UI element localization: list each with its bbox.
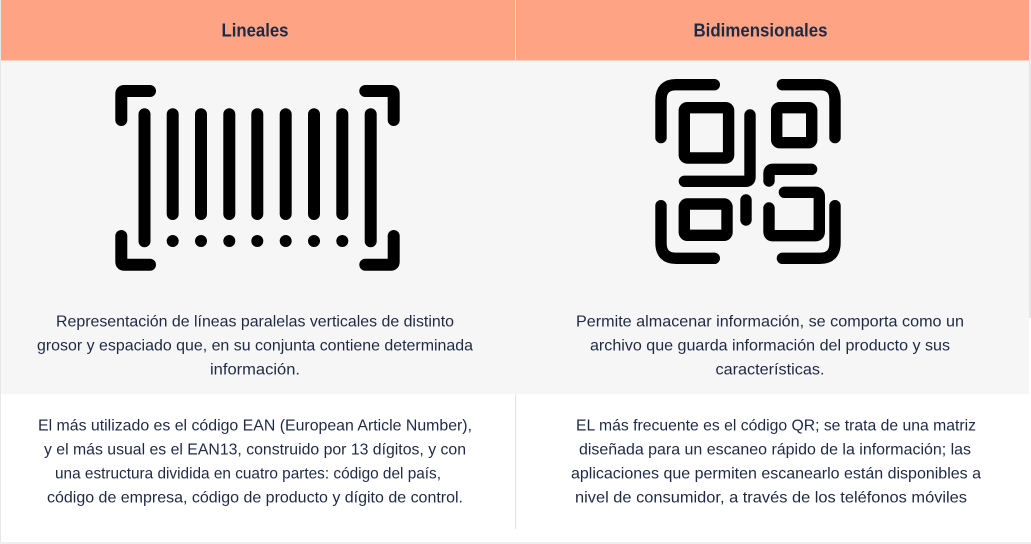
text: Lineales description [37,314,473,378]
text: Lineales description: grosor y espaciado que, en su conjunta contiene determinada [37,338,473,354]
text: Bidimensionales detail: diseñada para un escaneo rápido de la información; las [579,442,971,458]
text: Lineales detail: y el más usual es el EAN13, construido por 13 dígitos, y con [44,442,466,458]
text: Lineales detail [38,418,472,506]
panel background: Bidimensionales [515,61,1029,394]
text: Bidimensionales detail: EL más frecuente es el código QR; se trata de una matriz [576,418,976,434]
text: Bidimensionales detail [571,418,981,506]
text: Bidimensionales detail: nivel de consumidor, a través de los teléfonos móviles [575,490,967,506]
panel background: Lineales [1,61,515,394]
text: Bidimensionales description: características. [716,362,824,378]
text: Bidimensionales description: Permite almacenar información, se comporta como un [576,314,964,330]
panel: Lineales [1,0,515,506]
text: Lineales detail: El más utilizado es el código EAN (European Article Number), [38,418,472,434]
header: Bidimensionales: Bidimensionales [694,20,828,40]
text: Bidimensionales description: archivo que guarda información del producto y sus [590,338,950,354]
text: Lineales detail: código de empresa, código de producto y dígito de control. [47,490,463,506]
icon: QR code [661,85,835,258]
header: Lineales [1,0,515,61]
header: Lineales: Lineales [222,20,288,40]
icon: barcode [121,91,394,265]
text: Lineales description: Representación de líneas paralelas verticales de distinto [56,314,454,330]
text: Bidimensionales detail: aplicaciones que permiten escanearlo están disponibles a [571,466,981,482]
panel: Bidimensionales [515,0,1029,506]
text: Bidimensionales description [576,314,964,378]
header: Bidimensionales [515,0,1029,61]
text: Lineales description: información. [210,362,300,378]
text: Lineales detail: una estructura dividida en cuatro partes: código del país, [55,466,441,482]
